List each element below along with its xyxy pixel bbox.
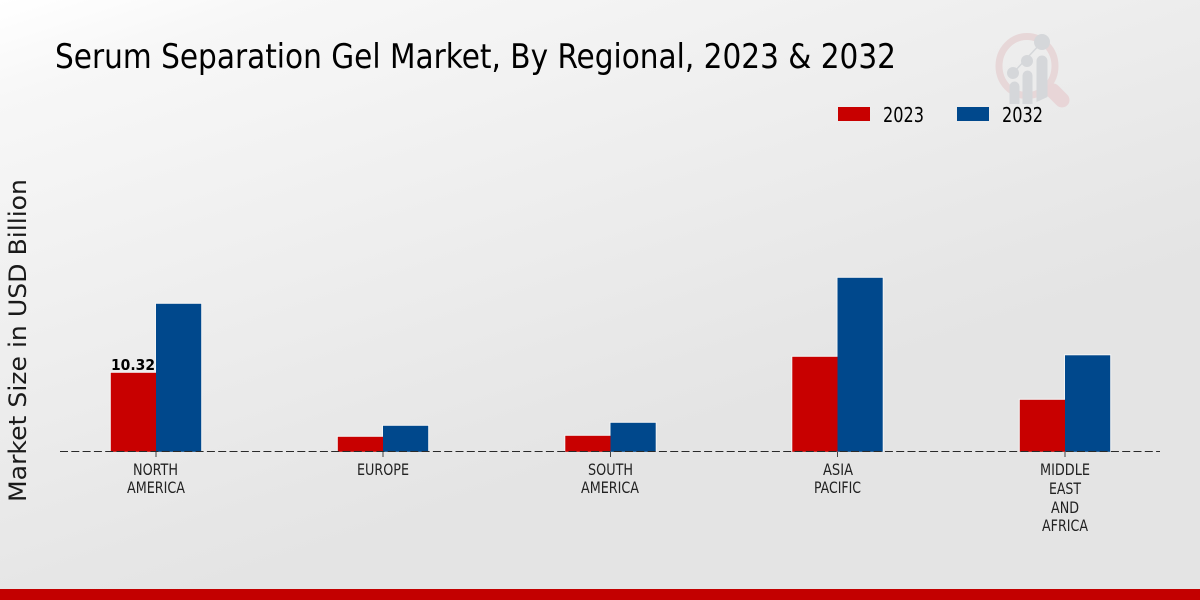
category label: North America: NORTH — [133, 460, 178, 479]
category label: Middle East and Africa: MIDDLE — [1040, 460, 1090, 479]
x axis baseline — [60, 450, 1160, 452]
bar group: South America — [565, 422, 656, 452]
legend item: 2023: 2023 — [883, 103, 924, 127]
y axis title: Market Size in USD Billion — [4, 179, 32, 502]
category label: South America: SOUTH — [588, 460, 633, 479]
footer bar — [0, 589, 1200, 600]
category label: Middle East and Africa: AFRICA — [1042, 516, 1088, 535]
bar group: Europe — [337, 425, 429, 452]
bar group: Middle East and Africa — [1019, 355, 1111, 452]
legend item: 2032 — [957, 103, 1043, 127]
legend — [838, 103, 1043, 127]
category label: Middle East and Africa: AND — [1051, 498, 1079, 517]
legend item: 2032: 2032 — [1002, 103, 1043, 127]
icon: watermark logo magnifier with bars — [999, 34, 1062, 104]
category label: Middle East and Africa: EAST — [1049, 479, 1081, 498]
category label: Europe: EUROPE — [357, 460, 409, 479]
category label: North America: AMERICA — [127, 478, 185, 497]
title: Serum Separation Gel Market, By Regional, 2023 & 2032 — [55, 37, 896, 76]
legend item: 2023 — [838, 103, 924, 127]
category label: South America: AMERICA — [581, 478, 639, 497]
category label: South America — [581, 460, 639, 497]
category label: Asia Pacific — [814, 460, 861, 497]
bar group: Asia Pacific — [792, 277, 883, 452]
category label: Middle East and Africa — [1040, 460, 1090, 535]
category label: North America — [127, 460, 185, 497]
x axis ticks — [156, 452, 1065, 457]
category label: Asia Pacific: ASIA — [823, 460, 853, 479]
bar group: North America — [110, 303, 202, 452]
data label: 10.32: 10.32 — [111, 356, 155, 374]
category label: Asia Pacific: PACIFIC — [814, 478, 861, 497]
